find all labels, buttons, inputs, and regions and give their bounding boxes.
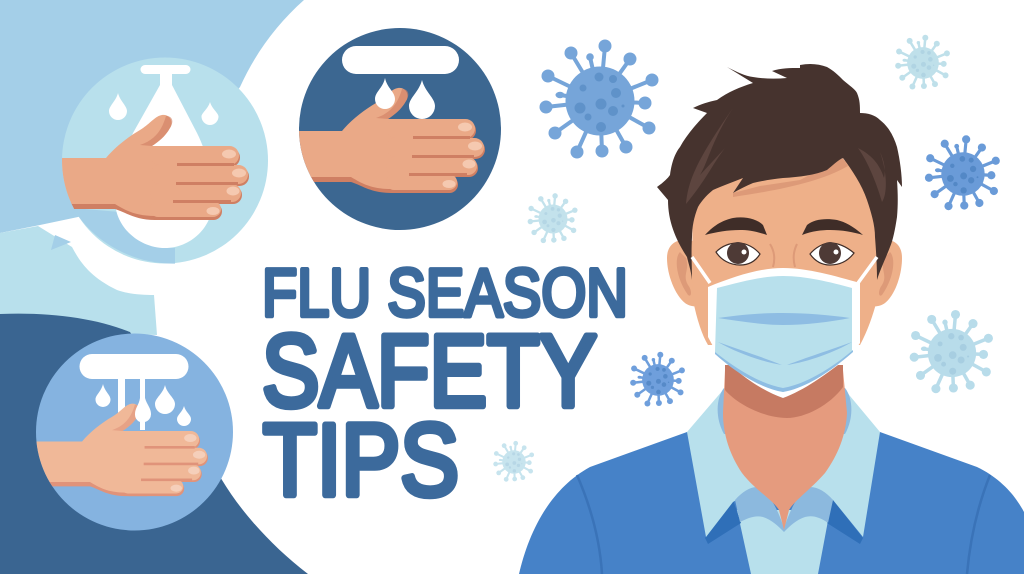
shirt collar [687,390,880,537]
hair shadow on forehead [733,158,848,197]
icon: faucet bar [342,46,459,74]
icon: hand 3 [36,404,208,496]
icon: ring arc [73,208,175,264]
sweater seams [577,475,990,574]
nose lines [770,244,797,267]
panel: dark blue background shape [0,314,308,574]
neck shadow [725,365,843,418]
collar inside shade [718,388,851,434]
icon: virus pale bottom [493,441,534,482]
icon: small pointer triangle [51,235,71,250]
icon: virus large [540,40,658,158]
neck [723,370,847,530]
title [262,255,628,517]
icon: faucet bar and stem [79,354,188,415]
icon: water drop right [202,102,218,125]
panel: hand washing circle 2 [299,28,501,230]
icon: water drop 2 [155,385,175,414]
face [692,150,878,345]
mask pleats [715,313,853,392]
title: FLU SEASON [262,255,628,331]
inner collar [735,487,833,532]
icon: center water stream [135,379,151,430]
panel: light blue background shape [0,0,304,233]
hair highlight left [686,108,733,204]
panel: hand washing circle 3 [15,334,233,530]
icon: virus pale small center [528,193,578,243]
right ear [865,240,902,306]
icon: water drop left [375,78,395,109]
icon: water drop 1 [96,384,110,407]
mask straps [692,257,877,283]
sweater [519,432,1024,574]
panel: pale blue background shape [0,226,157,335]
icon: virus blue small center [630,352,685,406]
right eye [810,242,854,265]
panel: hand washing circle 1 [62,58,268,264]
left ear [667,240,705,306]
hair highlight right [858,148,886,202]
right inner ear [879,252,893,296]
title: SAFETY [262,314,597,428]
face mask [708,268,860,398]
person wearing mask [519,64,1024,574]
left inner ear [677,252,691,296]
icon: hand 2 [299,88,485,193]
icon: water drop 3 [177,406,191,426]
icon: water drop right [409,80,435,119]
shirt front [737,510,830,574]
icon: hand 1 [62,114,249,220]
left eye [716,242,760,265]
collar shadow [705,500,863,544]
icon: virus pale top right [895,35,950,89]
left eyebrow [705,217,767,235]
title: TIPS [263,403,459,517]
right eyebrow [802,219,863,235]
icon: faucet [115,65,213,248]
icon: virus pale lower right [910,310,993,393]
icon: virus blue right [925,135,1000,210]
hair [657,64,902,280]
icon: water drop left [109,93,127,120]
